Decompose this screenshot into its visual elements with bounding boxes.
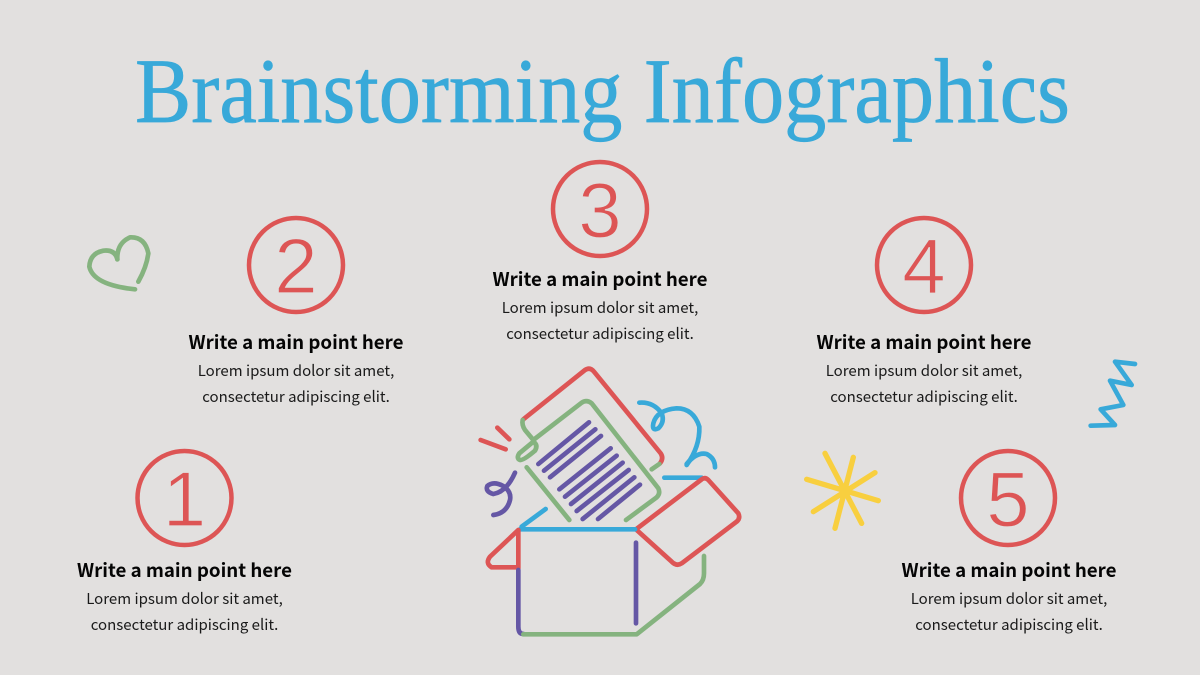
body text 1: consectetur adipiscing elit. <box>91 614 278 635</box>
panel: point 1 <box>77 451 292 635</box>
body text 1 <box>86 588 283 635</box>
paper text lines <box>538 422 640 519</box>
box vertical edges <box>518 543 636 634</box>
purple curl <box>487 473 515 515</box>
red sparks <box>481 428 509 449</box>
panel: point 2 <box>189 218 404 407</box>
body text 2: Lorem ipsum dolor sit amet, <box>198 360 394 381</box>
blue curl <box>639 403 715 478</box>
number badge 3: 3 <box>578 166 622 254</box>
back paper <box>523 369 662 463</box>
body text 5: Lorem ipsum dolor sit amet, <box>911 588 1107 609</box>
panel: point 3 <box>493 162 708 344</box>
body text 3: consectetur adipiscing elit. <box>506 323 694 344</box>
icon: green heart <box>89 237 148 289</box>
body text 2 <box>198 360 394 407</box>
number badge 5: 5 <box>986 455 1030 543</box>
body text 4 <box>826 360 1022 407</box>
number badge 5 <box>961 451 1055 545</box>
heading 1: Write a main point here <box>77 556 292 583</box>
illustration: open box with papers <box>481 369 739 634</box>
body text 4: Lorem ipsum dolor sit amet, <box>826 360 1022 381</box>
body text 5 <box>911 588 1107 635</box>
body text 3: Lorem ipsum dolor sit amet, <box>502 297 698 318</box>
number badge 1: 1 <box>163 455 206 543</box>
box right flap <box>636 478 739 565</box>
icon: yellow star burst <box>807 453 878 528</box>
heading 2: Write a main point here <box>189 328 404 355</box>
heading 3: Write a main point here <box>493 265 708 292</box>
front paper outline <box>518 401 659 520</box>
panel: point 5 <box>902 451 1117 635</box>
box bottom edge <box>523 556 704 634</box>
body text 4: consectetur adipiscing elit. <box>830 386 1018 407</box>
number badge 4 <box>877 218 971 312</box>
number badge 2 <box>249 218 343 312</box>
body text 1: Lorem ipsum dolor sit amet, <box>86 588 283 609</box>
box left flap <box>488 530 518 568</box>
number badge 1 <box>138 451 232 545</box>
body text 3 <box>502 297 698 344</box>
heading 5: Write a main point here <box>902 556 1117 583</box>
icon: blue zigzag <box>1091 362 1135 426</box>
number badge 2: 2 <box>274 222 318 310</box>
box top edge <box>520 509 635 529</box>
panel: point 4 <box>817 218 1032 407</box>
heading 4: Write a main point here <box>817 328 1032 355</box>
number badge 3 <box>553 162 647 256</box>
number badge 4: 4 <box>902 222 946 310</box>
title: Brainstorming Infographics <box>135 40 1070 142</box>
body text 5: consectetur adipiscing elit. <box>915 614 1103 635</box>
body text 2: consectetur adipiscing elit. <box>202 386 390 407</box>
